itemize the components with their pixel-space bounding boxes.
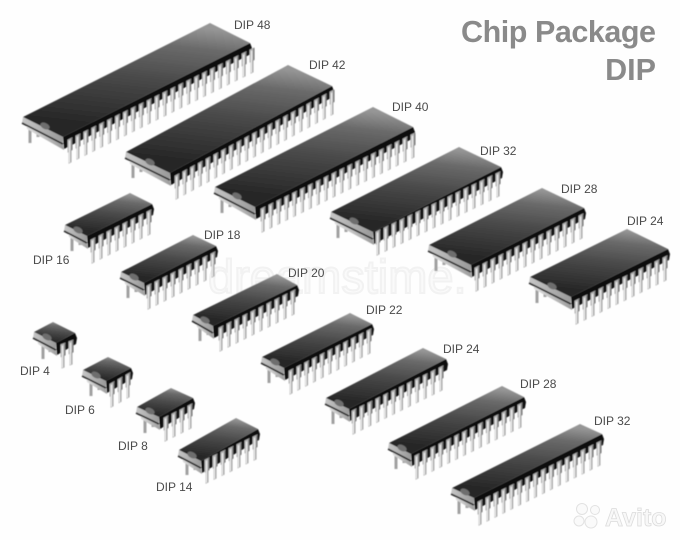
label: DIP 4: DIP 4 — [20, 364, 50, 378]
chip: DIP 28 lower — [388, 386, 526, 474]
label: DIP 28 lower: DIP 28 — [520, 377, 557, 391]
watermark: Avito logo: Avito — [605, 504, 667, 532]
label: DIP 20: DIP 20 — [288, 266, 325, 280]
label: DIP 14: DIP 14 — [156, 480, 193, 494]
title — [461, 15, 656, 87]
chip: DIP 40 — [214, 107, 417, 227]
chip: DIP 4 — [33, 322, 77, 362]
chip: DIP 8 — [136, 388, 195, 436]
label: DIP 22: DIP 22 — [366, 303, 403, 317]
label: DIP 32 upper: DIP 32 — [480, 144, 517, 158]
watermark: dreamstime: dreamstime. — [208, 250, 467, 303]
label: DIP 28 upper: DIP 28 — [561, 182, 598, 196]
watermark: Avito logo — [574, 504, 667, 532]
label: DIP 42: DIP 42 — [309, 58, 346, 72]
label: DIP 6: DIP 6 — [65, 403, 95, 417]
label: DIP 18: DIP 18 — [204, 228, 241, 242]
label: DIP 24 lower: DIP 24 — [443, 342, 480, 356]
label: DIP 16: DIP 16 — [33, 253, 70, 267]
label: DIP 32 lower: DIP 32 — [594, 414, 631, 428]
title: Chip Package — [461, 15, 656, 49]
label: DIP 8: DIP 8 — [118, 439, 148, 453]
chip: DIP 20 — [192, 274, 299, 346]
chip: DIP 18 — [120, 235, 218, 304]
title: DIP — [605, 53, 656, 87]
chip: DIP 24 upper — [529, 229, 670, 319]
label: DIP 24 upper: DIP 24 — [627, 214, 664, 228]
chip: DIP 14 — [178, 418, 260, 478]
chip: DIP 32 upper — [330, 147, 503, 250]
chip: DIP 16 — [64, 193, 154, 258]
chip: DIP 48 — [22, 23, 256, 158]
chip: DIP 42 — [125, 65, 336, 194]
label: DIP 40: DIP 40 — [392, 100, 429, 114]
chip: DIP 24 lower — [325, 348, 448, 429]
label: DIP 48: DIP 48 — [234, 18, 271, 32]
chip: DIP 6 — [82, 357, 133, 402]
chip: DIP 32 lower — [451, 424, 604, 520]
chip: DIP 22 — [261, 313, 374, 389]
chip: DIP 28 upper — [428, 188, 586, 286]
